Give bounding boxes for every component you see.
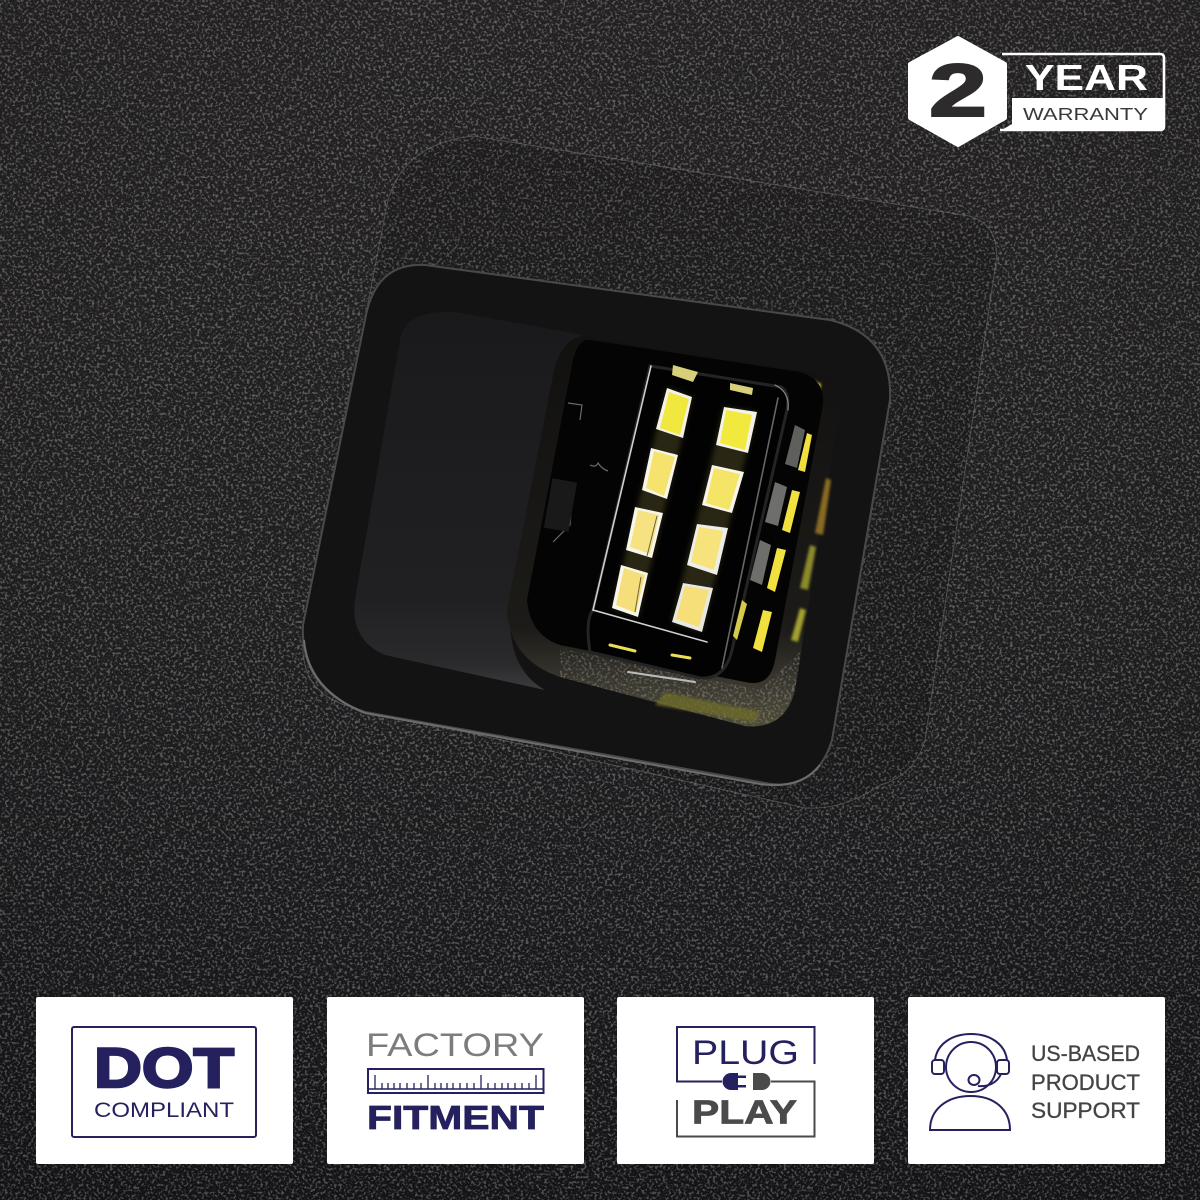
main LED array — [612, 388, 757, 632]
ruler icon — [368, 1069, 544, 1093]
icon: socket — [753, 1073, 770, 1090]
icon: plug — [723, 1073, 746, 1090]
panel: plug and play — [617, 997, 874, 1164]
LED module frame — [588, 366, 788, 682]
bezel lower lip highlight — [304, 640, 820, 785]
black lamp cavity — [527, 340, 823, 683]
icon: support agent — [930, 1034, 1010, 1130]
compliant label: COMPLIANT — [94, 1098, 234, 1122]
side LED strip — [733, 425, 812, 652]
LED chip 7 — [612, 565, 648, 617]
warranty badge — [910, 38, 1165, 145]
factory label: FACTORY — [366, 1027, 544, 1063]
fitment label: FITMENT — [367, 1099, 544, 1136]
LED light bloom — [612, 388, 757, 632]
DOT heading: DOT — [94, 1036, 234, 1099]
play frame line — [677, 1082, 814, 1136]
panel: factory fitment — [327, 997, 584, 1164]
LED chip 4 — [702, 465, 744, 513]
WARRANTY text: WARRANTY — [1023, 104, 1148, 124]
LED chip 2 — [716, 407, 757, 453]
outer black bezel — [303, 265, 890, 784]
LED chip 5 — [626, 507, 663, 558]
grainy rim texture — [560, 648, 800, 726]
LED chip 8 — [672, 583, 713, 632]
hexagon with number 2 — [910, 38, 1005, 145]
support text: US-BASED — [1031, 1041, 1140, 1066]
hexagon with number 2: 2 — [929, 49, 987, 132]
DOT frame — [72, 1027, 256, 1137]
LED chip 6 — [687, 524, 728, 575]
top peek LEDs — [672, 365, 753, 395]
play label: PLAY — [692, 1094, 797, 1130]
light housing assembly — [303, 136, 996, 808]
LED chip 3 — [642, 448, 678, 499]
panel: DOT compliant — [36, 997, 293, 1164]
support text: PRODUCT — [1031, 1070, 1140, 1095]
chip reflections — [635, 516, 657, 612]
circuit board component — [544, 403, 608, 542]
recessed left face — [354, 312, 583, 690]
clear mounting plate outline — [303, 136, 996, 808]
year box outline — [1000, 54, 1164, 130]
YEAR text: YEAR — [1025, 57, 1148, 98]
support text: SUPPORT — [1031, 1098, 1140, 1123]
warranty white bar — [1000, 98, 1165, 131]
reflected yellow glow on rim — [655, 381, 831, 722]
panel: product support — [908, 997, 1165, 1164]
LED chip 1 — [656, 388, 692, 438]
plug frame line — [677, 1027, 814, 1082]
dirty rim around lamp opening — [507, 337, 840, 726]
plug label: PLUG — [692, 1034, 799, 1072]
support text — [1031, 1041, 1140, 1123]
